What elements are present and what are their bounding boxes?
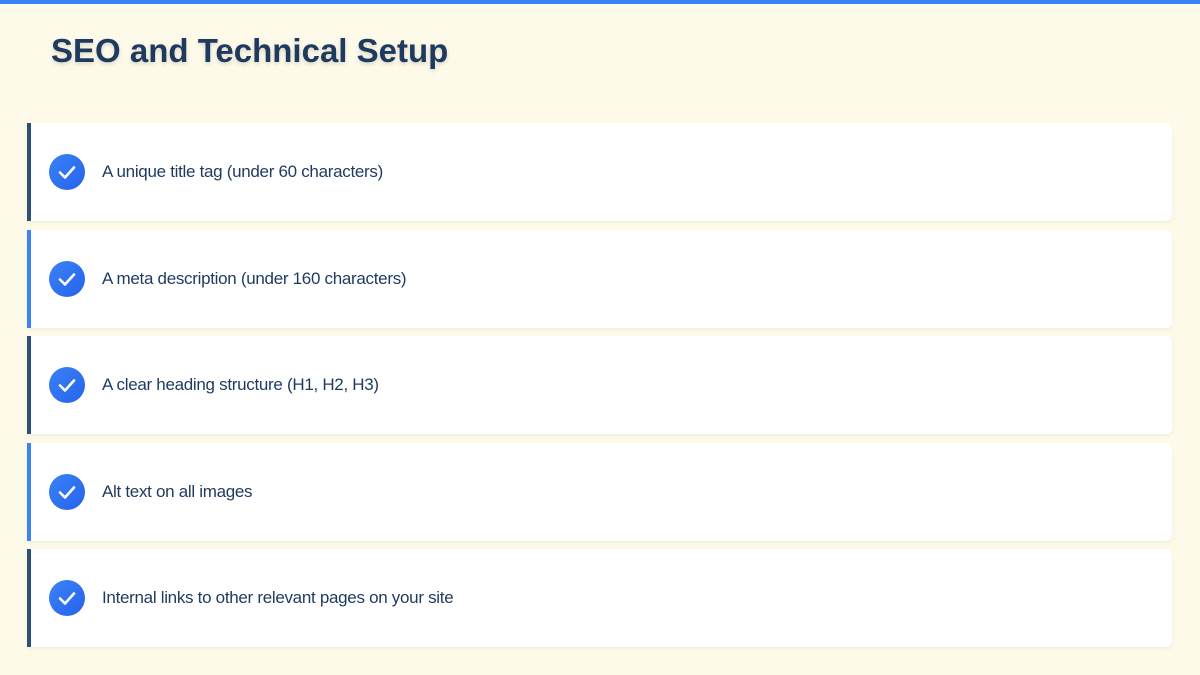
card: title tag bbox=[27, 123, 1172, 221]
card: alt text bbox=[27, 443, 1172, 541]
icon: check bbox=[49, 580, 85, 616]
title: SEO and Technical Setup bbox=[51, 32, 448, 69]
text: A unique title tag (under 60 characters) bbox=[102, 162, 383, 181]
text: A clear heading structure (H1, H2, H3) bbox=[102, 375, 379, 394]
icon: check bbox=[49, 261, 85, 297]
card: internal links bbox=[27, 549, 1172, 647]
text: A meta description (under 160 characters) bbox=[102, 269, 406, 288]
icon: check bbox=[49, 154, 85, 190]
icon: check bbox=[49, 474, 85, 510]
card: meta description bbox=[27, 230, 1172, 328]
card: heading structure bbox=[27, 336, 1172, 434]
text: Internal links to other relevant pages on your site bbox=[102, 588, 453, 607]
text: Alt text on all images bbox=[102, 482, 252, 501]
icon: check bbox=[49, 367, 85, 403]
